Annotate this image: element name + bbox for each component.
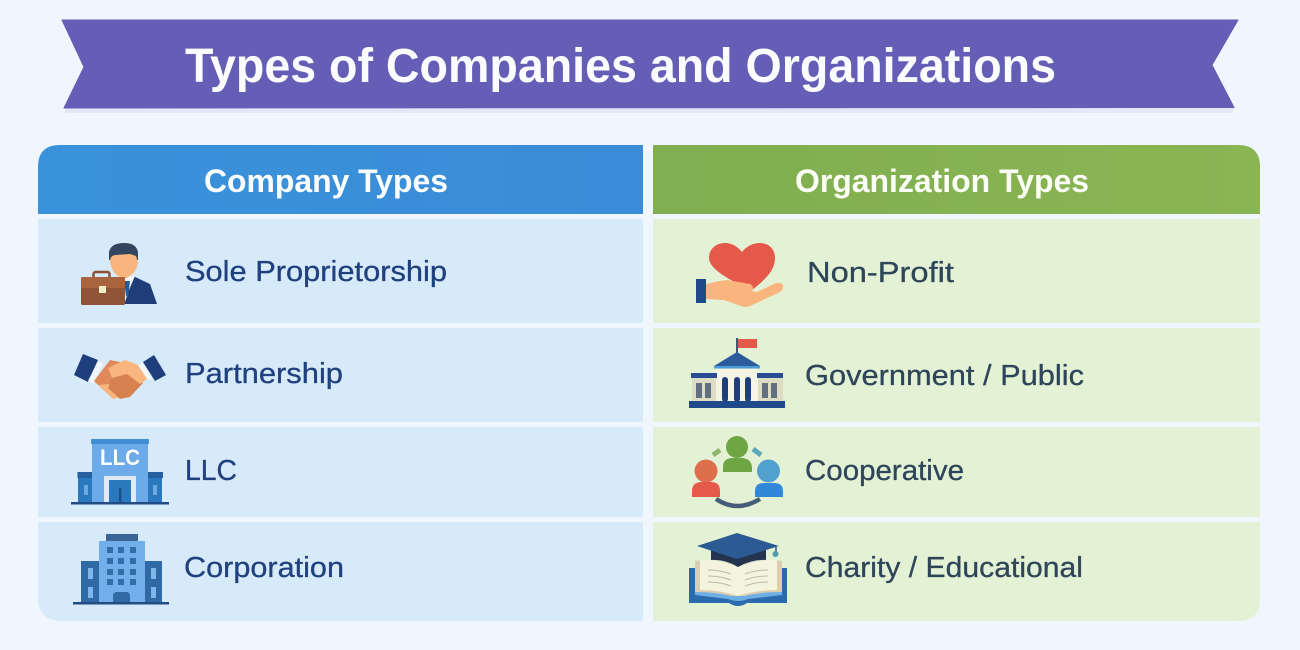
label: Charity / Educational [805, 552, 1083, 584]
organization types header: Organization Types [795, 163, 1089, 199]
icon: cooperative people [692, 436, 783, 506]
row: government / public [653, 328, 1260, 422]
panel: company types [38, 145, 643, 621]
row: corporation [38, 522, 643, 621]
row: cooperative [653, 427, 1260, 517]
icon: heart in hand [696, 243, 783, 307]
company types header: Company Types [204, 163, 448, 199]
row: llc [38, 427, 643, 517]
row: non-profit [653, 219, 1260, 323]
icon: graduation cap on open book [689, 533, 787, 606]
label: Cooperative [805, 455, 964, 487]
row: charity / educational [653, 522, 1260, 621]
label: LLC [185, 455, 237, 487]
title banner [62, 20, 1238, 113]
icon: llc building: LLC [100, 445, 140, 470]
icon: businessman with briefcase [81, 243, 157, 305]
label: Government / Public [805, 360, 1084, 392]
company types header [38, 145, 643, 214]
icon: government building [689, 338, 785, 408]
label: Sole Proprietorship [185, 256, 447, 288]
title text: Types of Companies and Organizations [185, 40, 1056, 93]
icon: llc building [71, 439, 169, 504]
row: sole proprietorship [38, 219, 643, 323]
label: Partnership [185, 358, 343, 390]
icon: corporation tower [73, 534, 169, 604]
panel: organization types [653, 145, 1260, 621]
organization types header [653, 145, 1260, 214]
label: Non-Profit [807, 257, 954, 289]
row: partnership [38, 328, 643, 422]
icon: handshake [74, 354, 166, 399]
label: Corporation [184, 552, 344, 584]
